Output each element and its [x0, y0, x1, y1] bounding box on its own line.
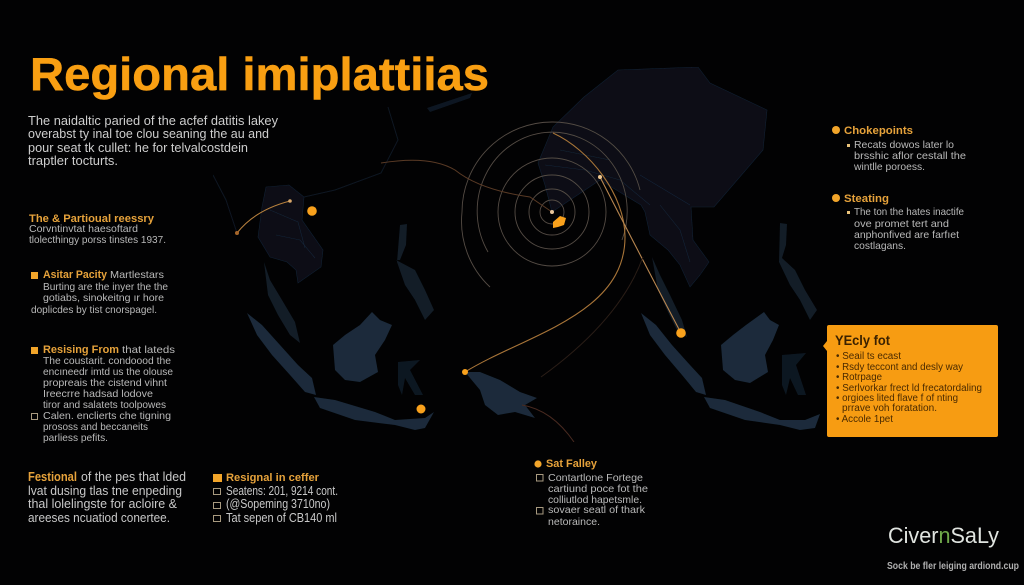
right note: steating: Steating	[844, 193, 889, 205]
sat falley note: netoraince.	[548, 516, 600, 528]
title: Regional imiplattiias	[30, 48, 489, 100]
bottom-left paragraph: Festional	[28, 470, 77, 484]
callout: key facts: prrave voh foratation.	[842, 403, 937, 414]
map: Southeast Asia	[213, 67, 820, 442]
regional list: (@Sopeming 3710no)	[226, 497, 330, 511]
left note: partioual reessry: Corvntinvtat haesoftard	[29, 223, 138, 235]
left note: asitar pacity: doplicdes by tist cnorspagel.	[31, 304, 157, 316]
right note: steating: The ton the hates inactife	[854, 206, 964, 218]
left note: partioual reessry	[29, 213, 166, 246]
sat falley note: Sat Falley	[546, 458, 598, 470]
regional list: Seatens: 201, 9214 cont.	[226, 484, 338, 498]
left note: asitar pacity	[31, 269, 168, 316]
callout: key facts: YEcly fot	[835, 333, 890, 348]
bottom-left paragraph: of the pes that lded	[81, 470, 186, 484]
right note: chokepoints: Recats dowos later lo	[854, 139, 954, 151]
right note: chokepoints: Chokepoints	[844, 125, 913, 137]
left note: resising from: propreais the cistend vihnt	[43, 377, 167, 389]
left note: partioual reessry: The & Partioual reessry	[29, 213, 155, 225]
landmass: right map region	[538, 67, 820, 430]
intro paragraph	[28, 114, 279, 168]
sat falley note	[534, 458, 648, 528]
location markers	[235, 175, 686, 414]
callout: key facts: • Rotrpage	[836, 372, 882, 383]
left note: resising from: Ireecrre hadsad lodove	[43, 388, 153, 400]
right note: steating: costlagans.	[854, 240, 906, 252]
left note: resising from: parliess pefits.	[43, 432, 108, 444]
intro paragraph: pour seat tk cullet: he for telvalcostdein	[28, 141, 248, 155]
regional list	[213, 472, 338, 525]
callout: key facts: • Rsdy teccont and desly way	[836, 362, 963, 373]
sat falley note: cartiund poce fot the	[548, 483, 648, 495]
regional list: Resignal in ceffer	[226, 472, 320, 484]
intro paragraph: overabst ty inal toe clou seaning the au and	[28, 127, 269, 141]
callout: key facts: • Serlvorkar frect ld frecatordaling	[836, 383, 982, 394]
left note: asitar pacity: Burting are the inyer the the	[43, 281, 168, 293]
left note: resising from: encıneedr imtd us the olouse	[43, 366, 173, 378]
right note: chokepoints	[832, 125, 966, 173]
left note: resising from	[31, 344, 175, 444]
bottom-left paragraph: lvat dusing tlas tne enpeding	[28, 484, 182, 498]
left note: resising from: that lateds	[122, 344, 175, 356]
left note: resising from: The coustarit. condoood the	[43, 355, 171, 367]
right note: chokepoints: wintlle poroess.	[853, 161, 925, 173]
callout: key facts: • Seail ts ecast	[836, 351, 901, 362]
regional list: Tat sepen of CB140 ml	[226, 511, 337, 525]
right note: steating: ove promet tert and	[854, 218, 949, 230]
sat falley note: Contartlone Fortege	[548, 472, 643, 484]
callout: key facts: • orgioes lited flave f of nting	[836, 393, 958, 404]
bottom-left paragraph: areeses ncuatiod conertee.	[28, 511, 170, 525]
intro paragraph: traptler tocturts.	[28, 154, 118, 168]
left note: asitar pacity: Asitar Pacity	[43, 269, 108, 281]
left note: resising from: Resising From	[43, 344, 119, 356]
sat falley note: colliutlod hapetsmle.	[548, 494, 642, 506]
left note: asitar pacity: Martlestars	[110, 269, 164, 281]
left note: resising from: tiror and salatets toolpowes	[43, 399, 166, 411]
sat falley note: sovaer seatl of thark	[548, 504, 646, 516]
right note: steating: anphonfived are farfıet	[854, 229, 959, 241]
bottom-left paragraph: thal lolelingste for acloire &	[28, 497, 178, 511]
brand logo: CivernSaLy	[888, 523, 999, 548]
right note: chokepoints: brsshic aflor cestall the	[854, 150, 966, 162]
left note: resising from: Calen. enclierts che tigning	[43, 410, 171, 422]
callout: key facts	[823, 325, 998, 437]
landmass: left map region	[213, 93, 537, 430]
left note: partioual reessry: tlolecthingy porss tinstes 1937.	[29, 234, 166, 246]
bottom-left paragraph	[28, 470, 186, 525]
route arcs	[237, 133, 681, 442]
callout: key facts: • Accole 1pet	[836, 414, 893, 425]
concentric chokepoint rings	[462, 122, 640, 287]
left note: asitar pacity: gotiabs, sinokeitng ır hore	[43, 292, 164, 304]
left note: resising from: prososs and beccaneits	[43, 421, 148, 433]
right note: steating	[832, 193, 964, 252]
intro paragraph: The naidaltic paried of the acfef datitis lakey	[28, 114, 279, 128]
